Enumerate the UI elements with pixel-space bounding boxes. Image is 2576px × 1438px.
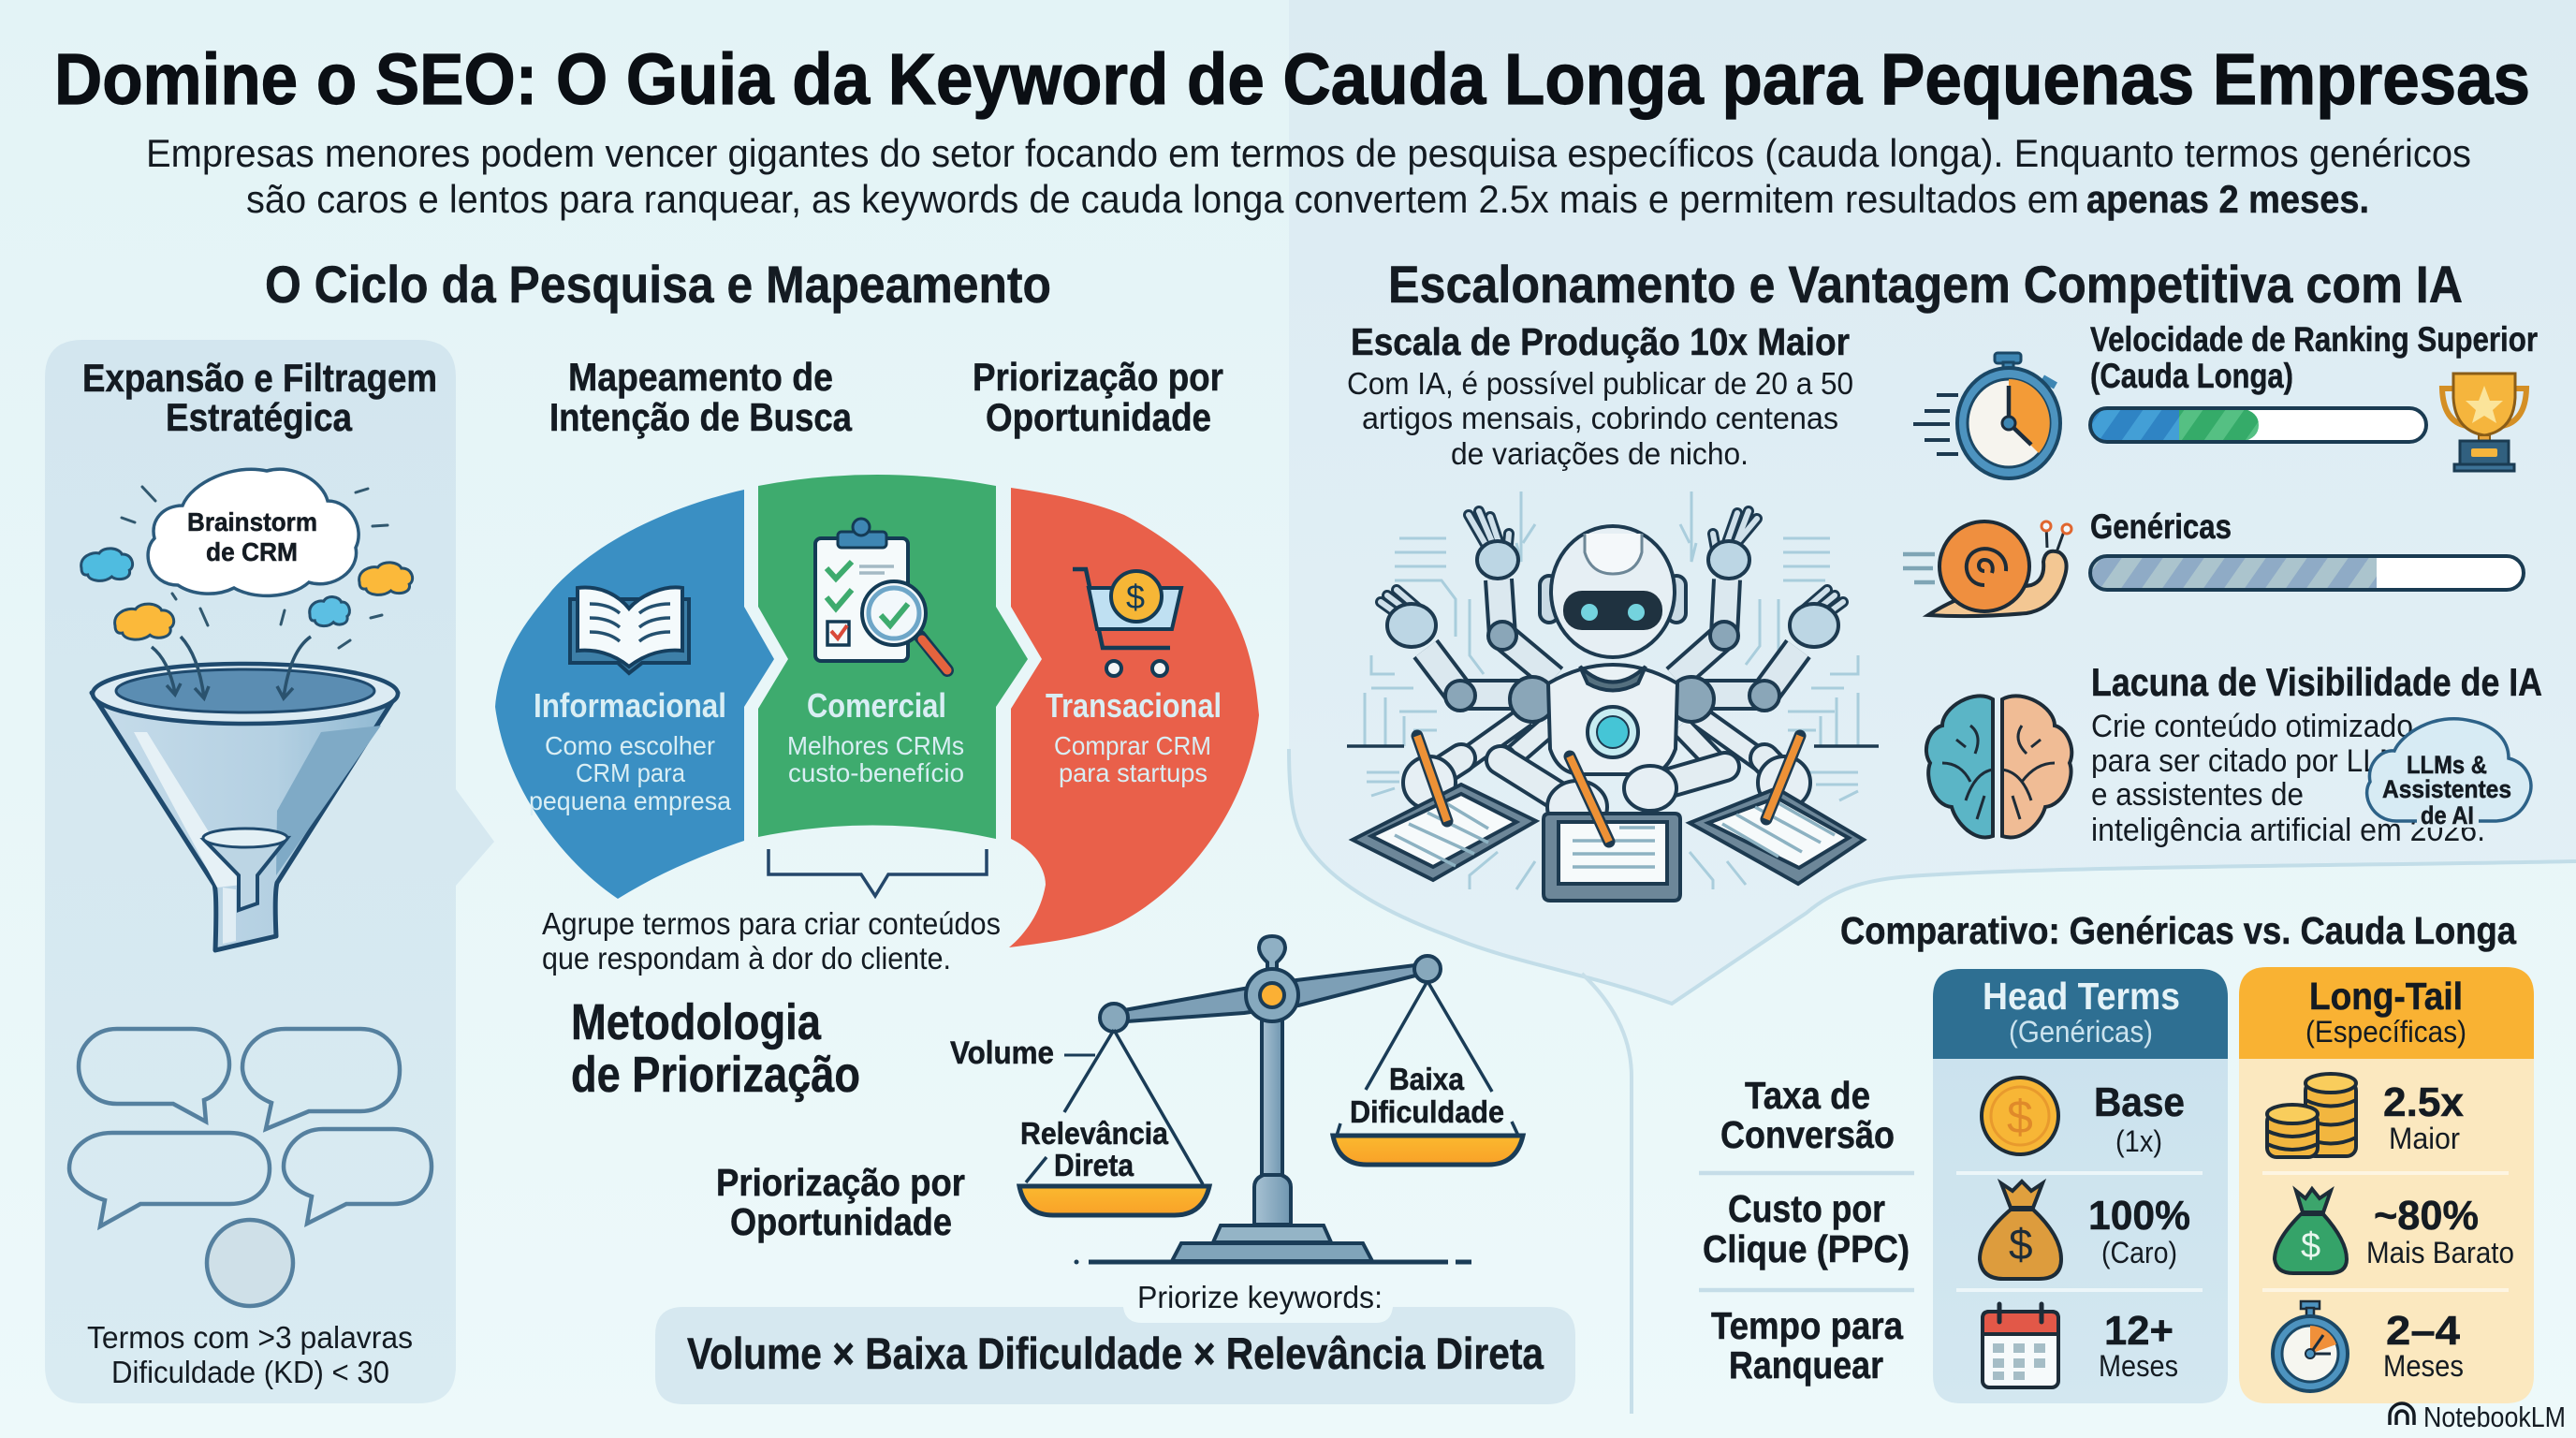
icon: shopping cart: $ <box>1126 578 1145 616</box>
table column: head terms: Base <box>2094 1079 2185 1125</box>
icon: green money bag <box>2275 1189 2347 1273</box>
panel: formula: Volume × Baixa Dificuldade × Relevância Direta <box>687 1328 1544 1378</box>
icon: small stopwatch <box>2273 1301 2348 1391</box>
icon: money bag <box>1980 1181 2061 1279</box>
icon: balance scale <box>1019 936 1523 1264</box>
filter criteria: Dificuldade (KD) < 30 <box>111 1355 389 1389</box>
panel outline <box>1289 749 2576 1004</box>
panel: commercial intent: Comercial <box>807 686 946 725</box>
elbow joints <box>1445 622 1779 774</box>
block: ranking speed: (Cauda Longa) <box>2090 357 2293 395</box>
icon: open book <box>570 587 689 673</box>
empty speech bubbles <box>69 1029 432 1306</box>
panel: informational intent <box>495 490 774 899</box>
icon: brainstorm cloud: de CRM <box>206 537 298 566</box>
panel: informational intent: Informacional <box>534 686 726 725</box>
divider line <box>1582 974 1632 1414</box>
label: direct relevance: Relevância <box>1020 1116 1169 1151</box>
panel: expansion and filtering <box>45 340 494 1403</box>
table column: long tail: Maior <box>2389 1122 2460 1155</box>
sub-heading: opportunity prioritization <box>716 1161 965 1243</box>
heading: search intent mapping: Mapeamento de <box>568 355 833 399</box>
robot arms <box>1426 580 1798 772</box>
table column: long tail: ~80% <box>2374 1193 2479 1239</box>
table column: head terms: (Genéricas) <box>2009 1015 2153 1049</box>
icon: shopping cart <box>1073 569 1181 676</box>
robot body <box>1548 665 1677 774</box>
heading: AI scaling: Escalonamento e Vantagem Competitiva com IA <box>1388 255 2463 314</box>
panel heading: Expansão e Filtragem <box>82 356 437 400</box>
progress bar: generic <box>2090 556 2524 590</box>
heading: opportunity prioritization <box>973 355 1223 439</box>
writing arms <box>1429 758 1784 807</box>
callout: LLMs cloud: Assistentes <box>2382 775 2511 803</box>
bracket <box>768 849 987 896</box>
table column: head terms: Meses <box>2099 1349 2178 1383</box>
block: AI visibility gap <box>1926 660 2542 848</box>
heading: prioritization methodology <box>571 994 860 1103</box>
icon: brainstorm cloud: Brainstorm <box>187 507 317 536</box>
label: direct relevance <box>1020 1116 1169 1182</box>
label: low difficulty: Baixa <box>1389 1062 1465 1096</box>
label: low difficulty <box>1350 1062 1504 1129</box>
block: generic keywords: Genéricas <box>2090 507 2232 546</box>
icon: green money bag: $ <box>2301 1226 2320 1266</box>
panel: commercial intent: Melhores CRMs <box>787 731 964 760</box>
label: volume: Volume <box>950 1035 1054 1071</box>
panel: informational intent: Como escolher <box>545 731 715 760</box>
heading: opportunity prioritization: Oportunidade <box>986 395 1211 439</box>
block: generic keywords <box>1903 507 2524 616</box>
panel: commercial intent: custo-benefício <box>788 758 964 787</box>
block: AI visibility gap: Crie conteúdo otimizado <box>2091 709 2413 744</box>
callout: LLMs cloud: de AI <box>2421 801 2474 829</box>
table row labels: Taxa de <box>1745 1074 1870 1117</box>
panel heading: Estratégica <box>166 395 353 439</box>
callout: LLMs cloud: LLMs & <box>2407 751 2487 779</box>
icon: brainstorm cloud <box>148 469 359 595</box>
progress bar: long tail <box>2090 408 2426 442</box>
sparks around cloud <box>122 487 388 648</box>
sub-heading: opportunity prioritization: Priorização por <box>716 1161 965 1204</box>
table column: long tail: 2.5x <box>2383 1079 2465 1125</box>
icon: coin <box>1982 1078 2058 1154</box>
icon: money bag: $ <box>2009 1220 2033 1269</box>
panel heading <box>82 356 437 439</box>
table column: long tail: (Específicas) <box>2305 1015 2466 1049</box>
table column: long tail: Mais Barato <box>2366 1236 2514 1269</box>
table column: head terms: (1x) <box>2115 1124 2162 1158</box>
table column: long tail <box>2239 967 2534 1403</box>
table row labels <box>1699 1074 1914 1387</box>
table column: head terms: Head Terms <box>1983 975 2180 1018</box>
block: AI visibility gap: e assistentes de <box>2091 777 2304 813</box>
panel: transactional intent: para startups <box>1059 758 1208 787</box>
chest core <box>1588 707 1638 757</box>
table column: head terms: 12+ <box>2104 1308 2174 1354</box>
icon: stopwatch <box>1913 353 2060 478</box>
filter criteria <box>87 1320 413 1389</box>
robot hands <box>1381 511 1843 647</box>
table column: long tail: 2–4 <box>2386 1308 2461 1354</box>
heading: search intent mapping: Intenção de Busca <box>549 395 853 439</box>
label: low difficulty: Dificuldade <box>1350 1094 1504 1129</box>
intro text <box>146 131 2471 221</box>
production scale text: Escala de Produção 10x Maior <box>1351 320 1850 363</box>
icon: coin stacks <box>2267 1074 2356 1157</box>
icon: coin: $ <box>2007 1091 2033 1143</box>
table row labels: Conversão <box>1720 1113 1895 1156</box>
intro text: apenas 2 meses. <box>2086 177 2369 221</box>
panel: AI scaling background <box>1289 0 2576 1004</box>
sub-heading: opportunity prioritization: Oportunidade <box>730 1200 952 1243</box>
table column: head terms: 100% <box>2088 1193 2190 1239</box>
panel: informational intent: CRM para <box>576 758 685 787</box>
panel: transactional intent <box>1009 488 1259 947</box>
icon: clipboard with magnifier <box>815 519 947 670</box>
icon: calendar <box>1983 1304 2058 1387</box>
pencils <box>1417 736 1800 842</box>
panel: formula: Priorize keywords: <box>1137 1280 1383 1314</box>
table row labels: Ranquear <box>1729 1343 1883 1387</box>
icon: snail <box>1903 521 2071 616</box>
heading: research cycle: O Ciclo da Pesquisa e Mapeamento <box>265 255 1051 314</box>
table column: head terms <box>1933 969 2228 1403</box>
table row labels: Custo por <box>1728 1187 1885 1230</box>
production scale text: de variações de nicho. <box>1451 436 1749 471</box>
table column: head terms: (Caro) <box>2101 1236 2177 1269</box>
heading: search intent mapping <box>549 355 853 439</box>
heading: opportunity prioritization: Priorização por <box>973 355 1223 399</box>
panel: transactional intent: Comprar CRM <box>1054 731 1211 760</box>
block: AI visibility gap: para ser citado por LLMs <box>2091 743 2419 779</box>
block: ranking speed <box>1913 320 2538 478</box>
icon: idea blobs <box>81 549 413 639</box>
icon: funnel <box>92 664 398 950</box>
table column: long tail: Long-Tail <box>2309 975 2463 1018</box>
callout: LLMs cloud <box>2367 719 2531 829</box>
production scale text: artigos mensais, cobrindo centenas <box>1362 401 1838 435</box>
robot head <box>1540 526 1686 657</box>
grouping note: que respondam à dor do cliente. <box>542 941 951 976</box>
panel: informational intent: pequena empresa <box>529 786 731 815</box>
heading: prioritization methodology: Metodologia <box>571 994 822 1050</box>
production scale text <box>1347 320 1853 471</box>
table column: long tail: Meses <box>2383 1349 2464 1383</box>
production scale text: Com IA, é possível publicar de 20 a 50 <box>1347 366 1853 401</box>
arrows into funnel <box>152 637 311 698</box>
icon: trophy <box>2442 374 2526 471</box>
intro text: são caros e lentos para ranquear, as keywords de cauda longa convertem 2.5x mais e permitem resultados em <box>246 177 2079 221</box>
grouping note: Agrupe termos para criar conteúdos <box>542 906 1001 941</box>
filter criteria: Termos com >3 palavras <box>87 1320 413 1355</box>
icon: multi-armed robot <box>1347 492 1879 901</box>
panel: transactional intent: Transacional <box>1046 686 1222 725</box>
icon: brain <box>1926 696 2071 837</box>
grouping note <box>542 906 1001 976</box>
label: direct relevance: Direta <box>1054 1148 1134 1182</box>
block: AI visibility gap: inteligência artificial em 2026. <box>2091 813 2485 848</box>
circuit traces <box>1365 492 1858 889</box>
table row labels: Tempo para <box>1711 1304 1904 1347</box>
intro text: Empresas menores podem vencer gigantes do setor focando em termos de pesquisa específicos (cauda longa). Enquanto termos genéricos <box>146 131 2471 175</box>
panel: formula <box>655 1280 1575 1404</box>
panel: commercial intent <box>758 475 1028 839</box>
table row labels: Clique (PPC) <box>1703 1227 1910 1270</box>
tablets <box>1353 785 1864 901</box>
heading: prioritization methodology: de Priorização <box>571 1047 860 1103</box>
